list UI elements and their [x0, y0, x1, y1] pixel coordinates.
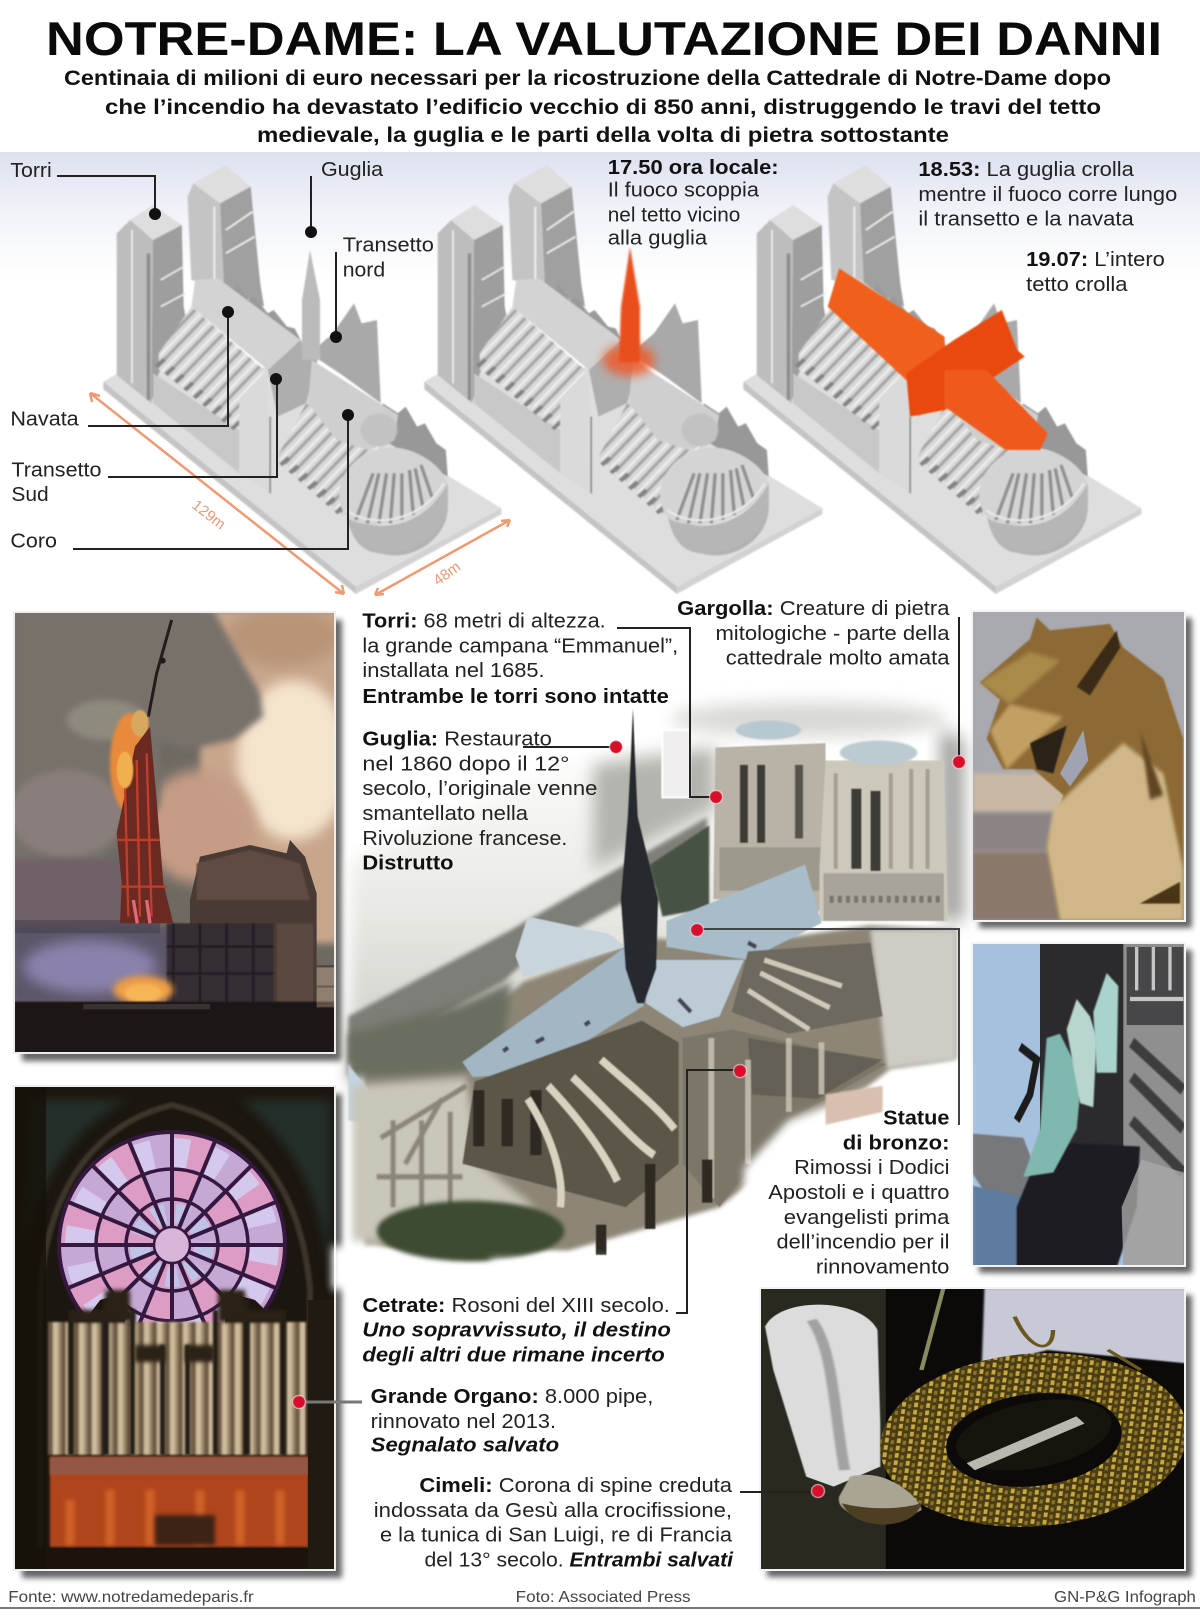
text: Gargolla: cattedrale molto amata [726, 648, 950, 670]
leader lines: red markers [299, 617, 959, 1492]
text: Grande Organo: Grande Organo: 8.000 pipe, [371, 1386, 653, 1408]
photo: bronze statues [972, 943, 1187, 1268]
towers [713, 743, 826, 912]
footer rule [0, 1607, 1200, 1609]
spire [621, 708, 658, 1003]
timeline: 17.50: Il fuoco scoppia [608, 180, 760, 202]
timeline: 19.07 [1026, 249, 1165, 296]
text: Guglia: secolo, l’originale venne [362, 778, 597, 800]
diagram labels [10, 159, 434, 553]
diagram labels: Torri [10, 160, 52, 182]
text: Torri [362, 610, 678, 708]
timeline: 18.53: mentre il fuoco corre lungo [918, 184, 1177, 206]
timeline: 18.53: il transetto e la navata [918, 209, 1135, 231]
timeline: 18.53: 18.53: La guglia crolla [918, 159, 1135, 181]
panel: timeline background band [0, 152, 1200, 277]
text: Guglia: nel 1860 dopo il 12° [362, 753, 569, 775]
subtitle: Centinaia di milioni di euro necessari per la ricostruzione della Cattedrale di Notre-Dame dopo [64, 67, 1111, 90]
text: Cimeli: del 13° secolo. Entrambi salvati [425, 1550, 733, 1572]
diagram labels: Coro [10, 531, 57, 553]
text: Torri: Torri: 68 metri di altezza. [362, 610, 606, 632]
white foreground [744, 1060, 968, 1285]
timeline: 17.50: alla guglia [608, 227, 708, 249]
diagram: fire at the spire [424, 165, 822, 594]
text: Statue di bronzo: Apostoli e i quattro [768, 1182, 949, 1204]
text: Cimeli: indossata da Gesù alla crocifissione, [374, 1500, 732, 1522]
text: Torri: la grande campana “Emmanuel”, [362, 635, 678, 657]
source credits: Fonte: www.notredamedeparis.fr [8, 1589, 254, 1606]
buttresses [732, 943, 883, 1034]
text: Statue di bronzo: Rimossi i Dodici [794, 1157, 949, 1179]
diagram: roof collapse [743, 165, 1141, 594]
photo: aerial view of the cathedral [332, 702, 968, 1290]
photo frame [14, 1086, 335, 1570]
text: Torri: installata nel 1685. [362, 660, 545, 682]
text: Grande Organo: Segnalato salvato [371, 1435, 559, 1457]
subtitle [64, 67, 1111, 147]
photo frame [760, 1288, 1185, 1570]
timeline: 18.53 [918, 159, 1177, 231]
text: Grande Organo: rinnovato nel 2013. [371, 1411, 556, 1433]
organ loft [50, 1457, 308, 1547]
rose window [57, 1130, 287, 1324]
photo: burning spire [10, 607, 350, 1058]
haze behind text [348, 730, 748, 1090]
burning roof [828, 268, 1048, 450]
diagram labels: Sud [11, 484, 49, 506]
dimension arrows [90, 393, 510, 595]
timeline: 17.50: nel tetto vicino [608, 205, 740, 227]
red marker dots [292, 740, 966, 1498]
timeline: 19.07: tetto crolla [1026, 274, 1128, 296]
photo frame [972, 611, 1185, 921]
text: Cetrate [362, 1295, 671, 1367]
text: Guglia: Distrutto [362, 853, 454, 875]
source credits [8, 1589, 1196, 1606]
text: Statue di bronzo [768, 1107, 950, 1279]
source credits: Foto: Associated Press [516, 1589, 691, 1606]
subtitle: medievale, la guglia e le parti della volta di pietra sottostante [257, 124, 949, 147]
photo shadows and frames [22, 618, 1192, 1578]
diagram labels: Guglia [321, 159, 384, 181]
roofs [515, 917, 626, 977]
text: Cimeli [374, 1475, 733, 1572]
text: Statue di bronzo: Statue [883, 1107, 949, 1129]
text: Statue di bronzo: dell’incendio per il [777, 1232, 949, 1254]
callout dots [149, 208, 354, 421]
text: Statue di bronzo: di bronzo: [843, 1132, 949, 1154]
photo: crown of thorns [760, 1288, 1191, 1572]
dimension labels: 129m [189, 497, 229, 533]
text: Torri: Entrambe le torri sono intatte [362, 686, 669, 708]
timeline: 17.50: 17.50 ora locale: [608, 157, 779, 179]
dimension labels [189, 497, 464, 589]
text: Gargolla: mitologiche - parte della [715, 623, 950, 645]
spire [302, 250, 320, 360]
organ pipes [48, 1322, 306, 1455]
text: Cetrate: Uno sopravvissuto, il destino [362, 1320, 671, 1342]
timeline: 19.07: 19.07: L’intero [1026, 249, 1165, 271]
organ tower crowns [70, 1290, 285, 1362]
text: Guglia: Guglia: Restaurato [362, 728, 552, 750]
text: Statue di bronzo: rinnovamento [816, 1257, 949, 1279]
diagram labels: Transetto [343, 235, 434, 257]
diagram labels: nord [343, 259, 385, 281]
text: Cimeli: e la tunica di San Luigi, re di Francia [380, 1525, 733, 1547]
subtitle: che l’incendio ha devastato l’edificio vecchio di 850 anni, distruggendo le travi del tetto [105, 96, 1101, 119]
callout leaders [57, 176, 348, 549]
text: Gargolla: Gargolla: Creature di pietra [677, 598, 950, 620]
text: Cimeli: Cimeli: Corona di spine creduta [419, 1475, 733, 1497]
cathedral body [364, 925, 956, 1251]
text: Guglia: Rivoluzione francese. [362, 828, 567, 850]
dimension labels: 48m [430, 558, 464, 589]
photo frame [972, 943, 1185, 1266]
photo frame [14, 612, 335, 1053]
text: Gargolla [677, 598, 950, 670]
text: Cetrate: Cetrate: Rosoni del XIII secolo. [362, 1295, 670, 1317]
text: Cetrate: degli altri due rimane incerto [362, 1345, 665, 1367]
diagram labels: Navata [10, 409, 80, 431]
fire glow [603, 344, 655, 376]
timeline: 17.50 [608, 157, 779, 249]
text: Guglia: smantellato nella [362, 803, 529, 825]
burning spire [619, 247, 640, 362]
text: Statue di bronzo: evangelisti prima [784, 1207, 950, 1229]
diagram labels: Transetto [11, 459, 101, 481]
text: Guglia [362, 728, 597, 875]
source credits: GN-P&G Infograph [1054, 1589, 1196, 1606]
diagram: cathedral anatomy [57, 165, 510, 595]
photo: gargoyle [972, 611, 1185, 921]
photo: rose window and grand organ [14, 1086, 335, 1570]
text: Grande Organo [371, 1386, 653, 1457]
title: NOTRE-DAME: LA VALUTAZIONE DEI DANNI [46, 12, 1162, 65]
